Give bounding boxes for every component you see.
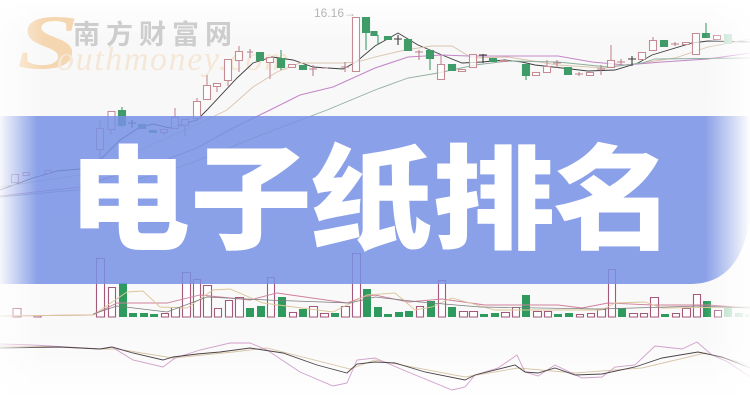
title text: 名: [553, 137, 675, 264]
green volume bars: [119, 283, 711, 317]
dark crosses: [128, 35, 636, 128]
title text: 子: [190, 137, 312, 264]
green candles: [118, 18, 710, 132]
title banner: [0, 116, 750, 284]
hollow red candles: [12, 18, 720, 182]
title text: 电: [68, 137, 190, 264]
title text: 排: [433, 137, 555, 264]
candlestick chart: [0, 18, 750, 197]
watermark: southmoney logo: 南方财富网: [73, 19, 238, 50]
watermark: southmoney logo: outhmoney.com: [57, 41, 290, 78]
price label 16.16: 16.16→: [314, 6, 356, 20]
watermark: southmoney logo: S: [17, 0, 79, 85]
title text: [68, 137, 675, 264]
title text: 纸: [310, 137, 432, 264]
volume bars: [0, 254, 750, 317]
moving average lines: [0, 33, 750, 197]
red cross candles: [247, 42, 679, 76]
hollow volume bars: [13, 254, 722, 317]
volume average lines: [0, 289, 750, 316]
faded green volume bars: [724, 307, 750, 317]
oscillator lines: [0, 342, 750, 390]
watermark: southmoney logo: [17, 0, 290, 85]
